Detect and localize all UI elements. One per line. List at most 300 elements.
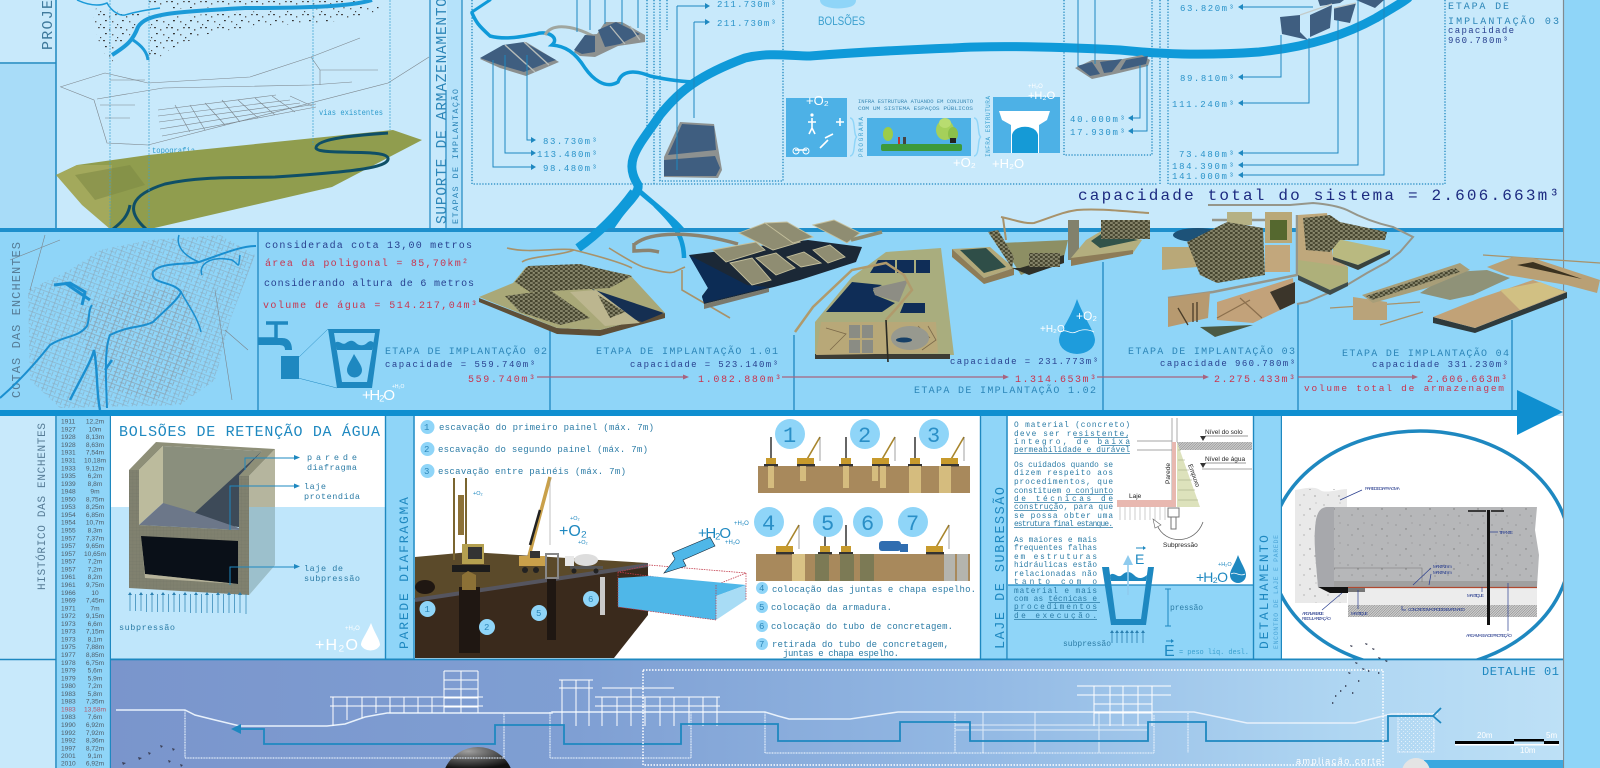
diagram: wall pressure section: Nível de água	[1205, 456, 1245, 463]
diagram: stages 4-7	[754, 507, 970, 581]
steps 4 to 7: colocação da armadura.	[771, 603, 892, 613]
oxygen and water labels: +H₂O	[725, 540, 740, 546]
diagram: wall pressure section: Subpressão	[1163, 542, 1198, 549]
building frames	[330, 671, 1171, 753]
text: concrete requirements	[1014, 422, 1130, 455]
volume callouts: right group: 111.240m³	[1172, 100, 1234, 110]
text block: flood volume calculation: volume de água = 514.217,04m³	[263, 300, 477, 312]
flood history table: 8,25m	[86, 504, 105, 511]
callout: laje protendida: laje	[304, 482, 326, 492]
flood history table: 7,15m	[86, 629, 105, 636]
flood history table: 1948	[61, 489, 76, 496]
flood history table: 1997	[61, 745, 76, 752]
flood history table: 8,13m	[86, 434, 105, 441]
flood history table: 1957	[61, 566, 76, 573]
panel: city and terrain layers	[56, 0, 429, 229]
detail labels: MANTA 3mm	[1433, 564, 1452, 569]
stage 1.01: ETAPA DE IMPLANTAÇÃO 1.01	[596, 345, 778, 358]
storage blocks: stage group B	[545, 22, 645, 57]
scene number markers: 6	[588, 595, 593, 605]
globe model	[445, 747, 511, 768]
flood map	[0, 235, 256, 410]
heading: cotas das enchentes: COTAS DAS ENCHENTES	[10, 242, 24, 398]
volume callouts: left group: 98.480m³	[543, 164, 597, 174]
icon: faucet and glass: +H₂O	[392, 384, 404, 390]
diagram: stages 1-3: 2	[858, 424, 871, 449]
mobile crane	[519, 477, 558, 578]
flood history table: 6,92m	[86, 760, 105, 768]
flood history table: 1955	[61, 528, 76, 534]
detail labels: ARGAMASSA DE PROTEÇÃO	[1466, 632, 1512, 638]
diagram: stages 4-7: 4	[762, 512, 775, 537]
rivers: storage system	[472, 0, 1408, 232]
flood history table: 1975	[61, 644, 76, 651]
stage 04: 2.606.663m³	[1427, 375, 1507, 386]
flood history table: 1973	[61, 621, 76, 628]
terrain model	[56, 130, 422, 229]
scene number markers: 2	[484, 623, 489, 633]
existing roads drawing	[60, 38, 429, 145]
detail labels	[1302, 486, 1513, 638]
flood history table: 8,1m	[88, 636, 103, 643]
text: concrete requirements: deve ser resistente,	[1014, 431, 1130, 439]
flood history table: 6,85m	[86, 512, 105, 519]
flood history table: 9,15m	[86, 613, 105, 620]
flood history table: 8,75m	[86, 496, 105, 503]
H2O drop label: +H₂O	[1196, 569, 1228, 585]
callout: laje de subpressao	[230, 564, 360, 585]
flood history table: 1928	[61, 434, 76, 441]
river continuation into flood band	[578, 192, 684, 258]
total capacity line: capacidade total do sistema = 2.606.663m³	[1078, 187, 1559, 205]
detail labels: MASTIQUE	[1467, 593, 1484, 598]
flood history table: 1954	[61, 520, 76, 527]
detail labels: PAREDE DIAFRAGMA	[1365, 486, 1401, 491]
volume callouts: center group: 40.000m³	[1070, 115, 1125, 125]
flood history table: 1911	[61, 419, 76, 426]
callout: laje protendida: protendida	[304, 492, 360, 502]
scale bar: 5m	[1546, 731, 1557, 740]
enlargement frame	[643, 670, 1383, 765]
storage blocks: stage group D	[1075, 55, 1150, 79]
volume callouts: right group: 184.390m³	[1172, 162, 1234, 172]
flood history table: 10m	[89, 426, 102, 433]
flood history table: 1992	[61, 738, 76, 745]
callout: parede diafragma: p a r e d e	[307, 453, 357, 463]
diagram: wall pressure section: Parede	[1165, 463, 1172, 484]
oxygen and water labels: +O₂	[578, 540, 588, 546]
stage 03 note: capacidade	[1448, 26, 1514, 36]
flood history table: 9m	[90, 489, 100, 496]
panel: detail of slab and wall	[1282, 416, 1563, 658]
diagram: buoyancy bucket: E	[1135, 551, 1144, 567]
flood history table: 1983	[61, 706, 76, 714]
oxygen and water labels: +H₂O	[698, 525, 731, 542]
detail labels: TIRANTE	[1499, 530, 1513, 535]
oxygen and water labels: +O₂	[473, 491, 483, 497]
city dots map	[92, 0, 380, 62]
text: failures: tanto com o	[1014, 579, 1097, 587]
right side band	[1564, 0, 1600, 768]
flood history table: 1990	[61, 722, 76, 729]
stage 03: ETAPA DE IMPLANTAÇÃO 03	[1128, 345, 1295, 358]
blue strip and corner globe	[1403, 758, 1563, 768]
scale bar: 20m	[1477, 731, 1493, 740]
flood history table: 1971	[61, 605, 76, 612]
scene number markers: 5	[536, 609, 541, 619]
flood history table: 7,54m	[86, 450, 105, 457]
text: failures: com as técnicas e	[1014, 596, 1097, 604]
heading: parede diafragma: PAREDE DIAFRAGMA	[397, 497, 412, 649]
flood history table: 7,2m	[88, 683, 103, 690]
flood history table: 1953	[61, 504, 76, 511]
flood history table: 1969	[61, 598, 76, 604]
flood history table: 7m	[90, 605, 100, 612]
volume callouts: center group	[1070, 0, 1147, 138]
icon: water drop: +H₂O	[1040, 324, 1065, 335]
flood history table: 5,6m	[88, 668, 103, 675]
steps 1 to 3: escavação do primeiro painel (máx. 7m)	[439, 423, 654, 433]
stage 03 note	[1448, 2, 1559, 46]
stage 02	[385, 345, 547, 386]
text: procedures: procedimentos, que	[1014, 479, 1113, 487]
detail labels: ARGAMASSA DE	[1302, 611, 1324, 616]
volume callouts: center group: 17.930m³	[1070, 128, 1125, 138]
volume callouts: left group: 83.730m³	[543, 137, 597, 147]
flood history table: 8,85m	[86, 652, 105, 659]
flood history table: 6,75m	[86, 660, 105, 667]
text: procedures: constituem o conjunto	[1014, 488, 1113, 496]
panel: suporte de armazenamento column	[430, 0, 462, 229]
stage 1.02: capacidade = 231.773m³	[950, 357, 1098, 367]
diagram: wall pressure section	[1117, 418, 1252, 549]
stage 03: 2.275.433m³	[1214, 375, 1295, 386]
flood history table: 9,12m	[86, 465, 105, 472]
flood history table: 1983	[61, 699, 76, 706]
stage 03 note: 960.780m³	[1448, 36, 1508, 46]
icon: white drop with H2O: +H₂O	[315, 637, 358, 654]
flood history table: 1954	[61, 512, 76, 519]
text: failures: hidráulicas estão	[1014, 562, 1097, 570]
flood history table: 7,45m	[86, 598, 105, 604]
panel: parede diafragma column	[386, 416, 414, 659]
steps 4 to 7: 4	[759, 584, 764, 594]
steps 4 to 7: colocação das juntas e chapa espelho.	[772, 585, 976, 595]
volume callouts: left group	[493, 0, 776, 174]
river on city map	[77, 0, 372, 60]
diagram: buoyancy bucket: E	[1164, 643, 1175, 660]
stage 03	[1128, 345, 1295, 386]
flood history table: 1931	[61, 458, 76, 464]
panel: program diagram: COM UM SISTEMA ESPAÇOS PÚBLICOS	[858, 105, 973, 112]
flood history table: 7,6m	[88, 714, 103, 721]
stage 1.01	[596, 345, 781, 386]
bridge infrastructure icon: +H₂O	[1028, 90, 1056, 102]
label: vias existentes: vias existentes	[319, 109, 383, 118]
flood history table: 7,92m	[86, 730, 105, 737]
diagram: buoyancy bucket: pressão	[1170, 604, 1203, 613]
stage 04: capacidade 331.230m³	[1372, 360, 1508, 370]
stage 04: volume total de armazenagem	[1304, 383, 1504, 394]
flood history table: 9,65m	[86, 543, 105, 550]
text: procedures: se possa obter uma	[1014, 513, 1113, 521]
heading: historico: HISTÓRICO DAS ENCHENTES	[35, 423, 49, 590]
panel: program diagram	[786, 84, 1060, 171]
flood history table: 10	[91, 590, 99, 597]
flood history table: 9,75m	[86, 582, 105, 589]
icon: faucet and glass: +H₂O	[362, 387, 395, 404]
callout: laje de subpressao: laje de	[304, 564, 343, 574]
diagram: buoyancy bucket	[1063, 546, 1249, 660]
retaining box outlines	[185, 710, 1434, 758]
flood history table: 1978	[61, 660, 76, 667]
steps 1 to 3: escavação entre painéis (máx. 7m)	[438, 467, 626, 477]
detail labels: MANTA 4mm	[1433, 570, 1452, 575]
flood history table: 1927	[61, 426, 76, 433]
models: stage 03	[1162, 212, 1297, 337]
diagram: wall pressure section: Nível do solo	[1205, 429, 1243, 436]
stage 03: capacidade 960.780m³	[1160, 359, 1295, 369]
program icon box: +O₂	[806, 93, 829, 108]
stage 04	[1304, 347, 1509, 394]
detail labels: CONCRETO MAGRO DESEMPENADO	[1408, 607, 1465, 612]
text: failures: relacionadas não	[1014, 571, 1097, 579]
flood history table: 7,35m	[86, 699, 105, 706]
diagram: stages 1-3	[758, 419, 970, 493]
flood history table: 1972	[61, 613, 76, 620]
panel: bolsoes de retencao da agua	[111, 416, 385, 659]
section: slab and wall	[1295, 488, 1539, 625]
text: procedures: estrutura final estanque.	[1014, 521, 1113, 529]
stage 04: ETAPA DE IMPLANTAÇÃO 04	[1342, 347, 1509, 360]
flood history table: 10,18m	[84, 458, 107, 464]
flood history table: 5,8m	[88, 691, 103, 698]
panel: historico das enchentes	[0, 416, 56, 768]
text: failures: em estruturas	[1014, 554, 1097, 562]
subheading: etapas de implantacao: ETAPAS DE IMPLANTAÇÃO	[450, 89, 461, 224]
callout: parede diafragma	[245, 453, 357, 473]
models: stage 1.01	[609, 220, 882, 318]
panel: project sidebar	[0, 0, 57, 229]
flood history table: 1957	[61, 559, 76, 566]
stage 1.01: capacidade = 523.140m³	[630, 360, 778, 370]
flood history table: 8,2m	[88, 574, 103, 581]
heading: suporte de armazenamento: SUPORTE DE ARMAZENAMENTO	[435, 0, 451, 224]
flood history table: 1973	[61, 629, 76, 636]
volume callouts: left group: 211.730m³	[717, 19, 776, 29]
stage 02: capacidade = 559.740m³	[385, 360, 535, 370]
stage 02: 559.740m³	[468, 375, 535, 386]
flood history table: 8,3m	[88, 528, 103, 534]
flood history table: 6,92m	[86, 722, 105, 729]
volume callouts: right group: 73.480m³	[1179, 150, 1234, 160]
stage 03 note: IMPLANTAÇÃO 03	[1448, 15, 1559, 28]
flood history table: 1957	[61, 543, 76, 550]
detail labels: MASTIQUE	[1351, 611, 1368, 616]
steps 1 to 3: escavação do segundo painel (máx. 7m)	[438, 445, 648, 455]
text: failures: As maiores e mais	[1014, 537, 1097, 545]
flood history table: 1957	[61, 551, 76, 558]
flood history table: 1957	[61, 535, 76, 542]
icon: white drop with H2O: +H₂O	[345, 626, 360, 632]
excavation site illustration	[415, 477, 648, 658]
flood history table: 1983	[61, 714, 76, 721]
icon: faucet and glass	[258, 323, 404, 404]
steps 1 to 3: 3	[424, 467, 429, 477]
flood history table: 12,2m	[86, 419, 105, 426]
flood history table: 1961	[61, 582, 76, 589]
heading: detalhamento: DETALHAMENTO	[1257, 535, 1272, 649]
flood history table: 5,9m	[88, 675, 103, 682]
icon: bolsoes blob	[818, 0, 865, 28]
label: subpressao: subpressão	[119, 623, 175, 633]
steps 4 to 7: retirada do tubo de concretagem,	[772, 640, 949, 650]
flood history table: 7,37m	[86, 535, 105, 542]
oxygen and water labels	[473, 491, 749, 546]
flood history table: 8,63m	[86, 442, 105, 449]
steps 1 to 3: 2	[424, 445, 429, 455]
steps 4 to 7: colocação do tubo de concretagem.	[771, 622, 953, 632]
H2O drop label	[1196, 555, 1246, 585]
water flow line	[231, 708, 1441, 744]
H2O drop label: +H₂O	[1218, 562, 1232, 568]
detail ring	[1270, 431, 1570, 669]
text: failures: procedimentos	[1014, 604, 1097, 612]
flood history table: 1980	[61, 683, 76, 690]
panel: program diagram: +H₂O	[992, 156, 1024, 171]
text: failures: frequentes falhas	[1014, 545, 1097, 553]
steps 1 to 3: 1	[424, 423, 429, 433]
text: failures	[1014, 537, 1100, 621]
flood history table: 1992	[61, 730, 76, 737]
flood history table: 1979	[61, 668, 76, 675]
infrastructure caption: INFRA ESTRUTURA ATUANDO EM CONJUNTO	[858, 99, 973, 105]
flood history table: 10,65m	[84, 551, 107, 558]
panel: detalhamento column	[1254, 416, 1282, 659]
diagram: wall pressure section: Empuxo	[1186, 463, 1201, 488]
flood history table: 6,6m	[88, 621, 103, 628]
panel: laje de subpressao column	[980, 416, 1009, 659]
flood history table: 1928	[61, 442, 76, 449]
scene number markers	[420, 591, 599, 635]
flood history table: 2001	[61, 753, 76, 760]
icon: water drop	[1040, 299, 1097, 354]
diagram: stages 4-7: 6	[861, 512, 874, 537]
steps 1 to 3	[420, 420, 654, 478]
callout: parede diafragma: diafragma	[307, 463, 357, 473]
storage blocks: stage group C	[664, 122, 722, 178]
diagram: stages 1-3: 3	[927, 424, 940, 449]
text: concrete requirements: íntegro, de baixa	[1014, 439, 1130, 447]
callout: laje protendida	[230, 482, 360, 530]
program icon box	[786, 93, 847, 157]
panel: program diagram: INFRA ESTRUTURA	[985, 96, 992, 157]
stage 1.01: 1.082.880m³	[698, 375, 781, 386]
diagram: wall pressure section: Laje	[1129, 493, 1142, 500]
diagram: buoyancy bucket: = peso líq. desl.	[1179, 649, 1249, 657]
oxygen and water labels: +O₂	[559, 523, 587, 540]
flood history table: 7,88m	[86, 644, 105, 651]
flood history table: 2010	[61, 760, 76, 768]
drilling rig	[452, 478, 490, 590]
stage 1.02	[914, 357, 1098, 397]
diagram: stages 4-7: 5	[821, 512, 834, 537]
scale bar	[1455, 731, 1559, 755]
flood history table: 1973	[61, 636, 76, 643]
diagram: stages 1-3: 1	[783, 424, 796, 449]
oxygen and water labels: +O₂	[570, 516, 580, 522]
models: stage 02	[479, 248, 665, 336]
flood history table: 8,36m	[86, 738, 105, 745]
dotted stage frames	[472, 0, 1445, 184]
stage 03 note: ETAPA DE	[1448, 2, 1509, 13]
arrow into water	[664, 537, 715, 573]
callout: laje de subpressao: subpressão	[304, 574, 360, 584]
text: procedures	[1014, 462, 1113, 529]
volume callouts: right group: 141.000m³	[1172, 172, 1234, 182]
heading: bolsoes: BOLSÕES DE RETENÇÃO DA ÁGUA	[119, 423, 380, 441]
flood history table: 1931	[61, 450, 76, 457]
models: stage 04	[1330, 255, 1600, 333]
brace and program label: PROGRAMA	[858, 117, 865, 157]
flood history table: 1979	[61, 675, 76, 682]
panel: program diagram: +H₂O	[1028, 84, 1043, 90]
icon: white drop with H2O	[315, 623, 380, 654]
uplift arrows	[128, 592, 246, 614]
text block: flood volume calculation: considerada cota 13,00 metros	[265, 240, 472, 252]
birds left	[122, 745, 183, 767]
label: topografia: topografia	[152, 147, 195, 156]
park scene	[867, 118, 971, 156]
steps 4 to 7	[756, 582, 976, 659]
flood history table: 7,2m	[88, 566, 103, 573]
steps 4 to 7: 5	[759, 603, 764, 613]
cumulative arrows	[537, 374, 1418, 380]
text block: flood volume calculation: área da poligonal = 85,70km²	[265, 258, 468, 270]
flood history table: 1933	[61, 465, 76, 472]
terrain profile	[116, 710, 1438, 726]
flood history table: 8,72m	[86, 745, 105, 752]
text: concrete requirements: O material (concreto)	[1014, 422, 1130, 430]
steps 4 to 7: 7	[759, 640, 764, 650]
text: procedures: construção, para que	[1014, 504, 1113, 512]
models: stage 1.02	[795, 248, 954, 362]
text: procedures: dizem respeito aos	[1014, 470, 1113, 478]
brace and infra label	[974, 118, 981, 156]
panel: cotas das enchentes band	[0, 228, 1563, 410]
flood history table: 1939	[61, 481, 76, 488]
flood history table: 8,8m	[88, 481, 103, 488]
heading: laje de subressao: LAJE DE SUBRESSÃO	[993, 487, 1009, 649]
text block: flood volume calculation	[263, 240, 477, 312]
stage 1.02: ETAPA DE IMPLANTAÇÃO 1.02	[914, 384, 1096, 397]
flood history table: 1961	[61, 574, 76, 581]
label: detalhe 01: DETALHE 01	[1482, 665, 1559, 679]
heading: projeto: PROJE	[40, 0, 57, 50]
flood history table: 1983	[61, 691, 76, 698]
text: failures: material e mais	[1014, 588, 1097, 596]
panel: laje de subpressao content	[1008, 416, 1253, 660]
stage 1.02: 1.314.653m³	[1015, 375, 1096, 386]
storage blocks: stage group A	[480, 42, 559, 76]
steps 4 to 7: 6	[759, 622, 764, 632]
models: stage 1.02 upper block	[952, 209, 1150, 284]
volume callouts: right group: 89.810m³	[1180, 74, 1234, 84]
icon: bolsoes blob: BOLSÕES	[818, 13, 865, 28]
steps 4 to 7: juntas e chapa espelho.	[783, 649, 899, 659]
textured block	[1398, 712, 1434, 752]
diagram: stages 4-7: 7	[906, 512, 919, 537]
